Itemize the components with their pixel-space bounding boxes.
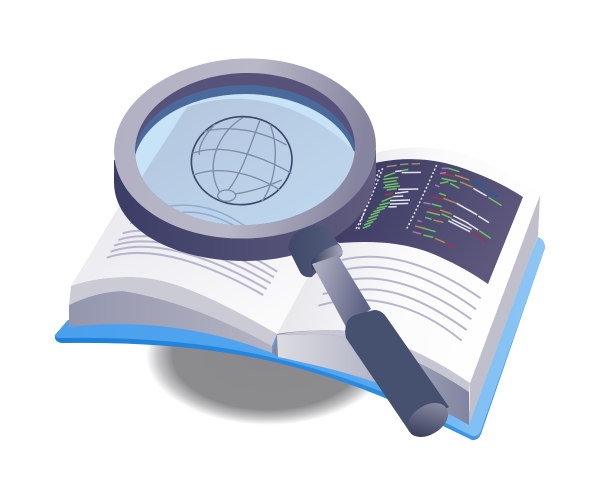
left page block — [69, 190, 345, 357]
right page block — [277, 147, 540, 425]
lens rim side — [114, 150, 376, 261]
right page sheet — [277, 147, 540, 383]
fore edge strip — [469, 195, 540, 425]
right page side edge — [277, 334, 469, 425]
blue book cover — [55, 237, 545, 440]
magnifying glass lens — [111, 54, 379, 261]
handle collar — [288, 225, 342, 277]
handle end cap — [402, 396, 454, 444]
collar ring — [311, 244, 343, 270]
ground shadow — [146, 285, 390, 425]
globe icon — [188, 112, 296, 209]
right page lighter band — [277, 330, 470, 392]
left page lighter band — [69, 277, 277, 346]
left page sheet — [71, 190, 345, 334]
lens rim top — [111, 54, 379, 243]
left page side edge — [69, 291, 272, 353]
left page text lines — [107, 221, 277, 295]
magnified page lines — [170, 205, 245, 226]
illustration: open book under magnifying glass — [54, 58, 545, 440]
spine notch — [272, 334, 278, 357]
handle neck — [312, 255, 371, 327]
glass reflection — [142, 98, 355, 225]
handle grip — [345, 310, 449, 431]
code lines — [355, 164, 502, 247]
code screen on right page — [330, 159, 523, 284]
lens interior — [135, 73, 355, 225]
right page text lines — [318, 257, 481, 341]
magnifying glass handle — [288, 225, 454, 444]
